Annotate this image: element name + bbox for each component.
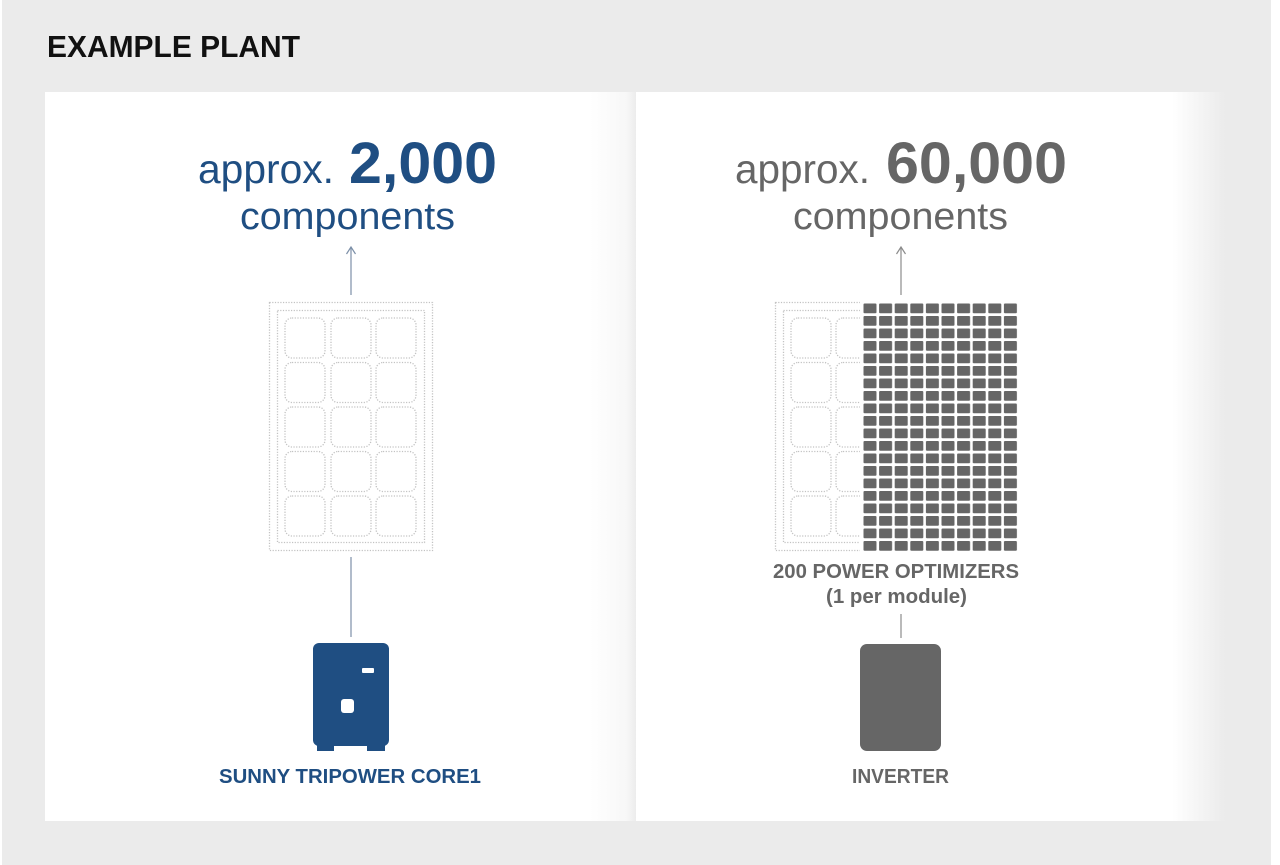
label: Sunny Tripower Core1: SUNNY TRIPOWER CORE1 [219,766,481,788]
label: 200 power optimizers: 200 POWER OPTIMIZERS [773,561,1019,583]
connector: module to inverter [350,557,352,637]
component count: 60,000: 60,000 [886,131,1067,196]
component count: 2,000 [198,131,497,238]
label: inverter: INVERTER [852,766,950,788]
arrow: up to component count [346,247,356,295]
component count: 2,000: approx. [198,146,334,192]
component count: 60,000: components [793,196,1008,238]
icon: Sunny Tripower inverter [313,643,389,751]
icon: solar module outline, partly covered [774,302,860,552]
component count: 60,000 [735,131,1067,238]
label: 200 power optimizers [773,561,1019,608]
connector: optimizers to inverter [900,614,902,638]
chart: grid of 200 power optimizers [864,304,1018,551]
component count: 60,000: approx. [735,146,870,192]
component count: 2,000: 2,000 [349,131,497,196]
label: 200 power optimizers: (1 per module) [826,586,967,608]
panel: Sunny Tripower Core1 plant [45,92,636,821]
title: EXAMPLE PLANT [47,29,300,64]
panel: power optimizer plant [636,92,1225,821]
icon: solar module outline [270,302,432,550]
icon: generic inverter [860,644,941,751]
component count: 2,000: components [240,196,455,238]
arrow: up to component count [896,247,906,295]
